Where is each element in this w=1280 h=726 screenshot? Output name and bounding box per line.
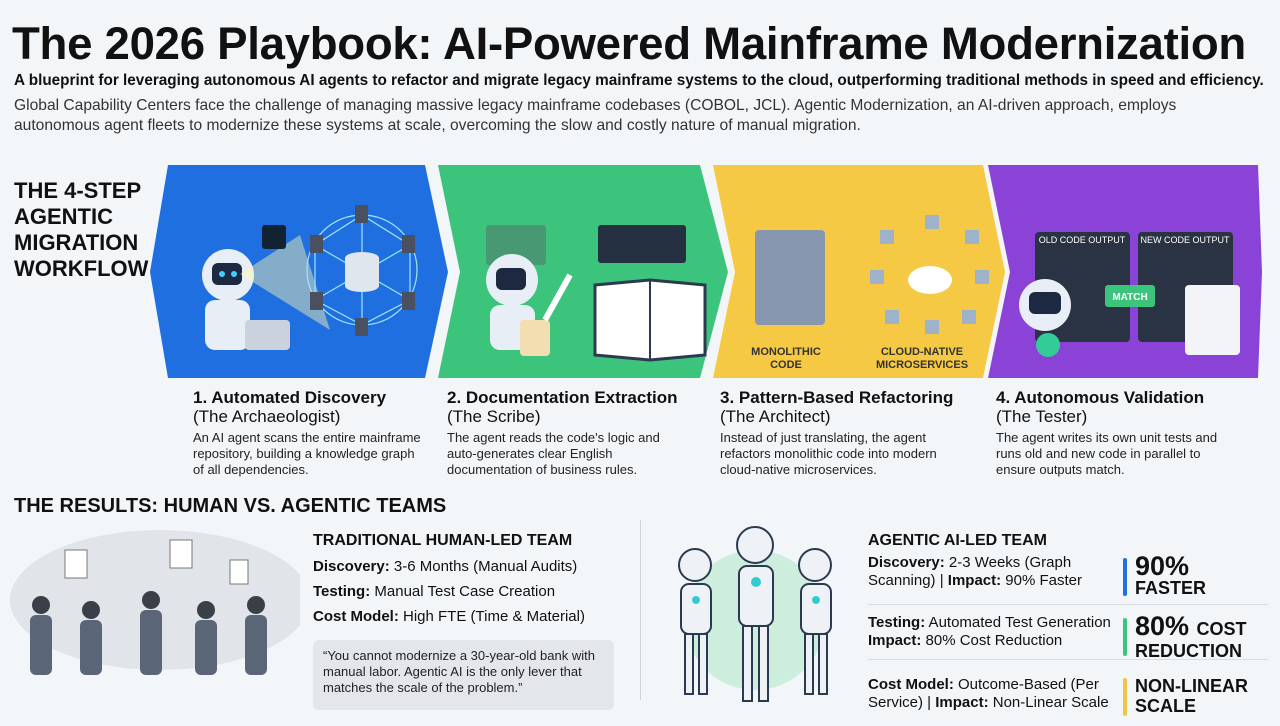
workflow heading: WORKFLOW: [14, 256, 148, 281]
step 3 text: [720, 388, 953, 477]
icon: monolith vs microservices: [755, 230, 825, 325]
step 1 text: [193, 388, 421, 477]
step 4 text: [996, 388, 1217, 477]
illustration: overwhelmed humans: [10, 530, 300, 675]
panel: step 2: [438, 165, 728, 378]
intro paragraph: Global Capability Centers face the challenge of managing massive legacy mainframe codebases (COBOL, JCL). Agentic Modernization, an AI-driven approach, employs autonomous agent fleets to modernize these systems at scale, overcoming the slow and costly nature of manual migration.: [14, 97, 1176, 134]
metric: cost model: [868, 676, 1248, 716]
step 2 text: (The Scribe): [447, 407, 541, 426]
quote callout: [313, 640, 614, 710]
metric: testing: [868, 614, 1268, 660]
metric: discovery: [868, 554, 1268, 605]
panel: step 1: [150, 165, 448, 378]
panel: step 3: CODE: [770, 359, 802, 371]
metric: discovery: 90%: [1135, 551, 1189, 581]
metric: cost model: SCALE: [1135, 696, 1196, 716]
results heading: THE RESULTS: HUMAN VS. AGENTIC TEAMS: [14, 495, 446, 517]
metric: discovery: FASTER: [1135, 578, 1206, 598]
metric: cost model: Cost Model: Outcome-Based (Per Service) | Impact: Non-Linear Scale: [868, 676, 1109, 711]
agentic team column: [868, 532, 1268, 716]
panel: step 3: CLOUD-NATIVE: [881, 346, 963, 358]
icon: scribe robot: [486, 225, 686, 356]
icon: tester robot: [1019, 232, 1240, 357]
metric: cost model: NON-LINEAR: [1135, 676, 1248, 696]
panel: step 3: [713, 165, 1005, 378]
panel: step 4: [988, 165, 1262, 378]
step 4 text: 4. Autonomous Validation: [996, 388, 1204, 407]
metric: testing: REDUCTION: [1135, 641, 1242, 661]
metric: discovery: Discovery: 2-3 Weeks (Graph Scanning) | Impact: 90% Faster: [868, 554, 1082, 589]
step 4 text: (The Tester): [996, 407, 1087, 426]
quote callout: “You cannot modernize a 30-year-old bank with manual labor. Agentic AI is the only lever that matches the scale of the problem.”: [323, 648, 595, 695]
icon: tester robot: NEW CODE OUTPUT: [1140, 235, 1230, 245]
metric: testing: Testing: Automated Test Generation Impact: 80% Cost Reduction: [868, 614, 1111, 649]
traditional team column: Testing: Manual Test Case Creation: [313, 583, 555, 600]
step 2 text: 2. Documentation Extraction: [447, 388, 677, 407]
step 4 text: The agent writes its own unit tests and runs old and new code in parallel to ensure outputs match.: [996, 430, 1217, 477]
subtitle: A blueprint for leveraging autonomous AI agents to refactor and migrate legacy mainframe systems to the cloud, outperforming traditional methods in speed and efficiency.: [14, 72, 1264, 89]
panel: step 3: MONOLITHIC: [751, 346, 821, 358]
icon: knowledge graph: [307, 215, 417, 325]
title: The 2026 Playbook: AI-Powered Mainframe Modernization: [12, 18, 1246, 69]
step 1 text: 1. Automated Discovery: [193, 388, 386, 407]
traditional team column: Discovery: 3-6 Months (Manual Audits): [313, 558, 577, 575]
workflow heading: MIGRATION: [14, 230, 138, 255]
traditional team column: [313, 532, 585, 625]
step 1 text: (The Archaeologist): [193, 407, 340, 426]
workflow heading: THE 4-STEP: [14, 178, 141, 203]
agentic team column: AGENTIC AI-LED TEAM: [868, 532, 1047, 549]
step 2 text: The agent reads the code's logic and auto-generates clear English documentation of business rules.: [447, 430, 660, 477]
step 3 text: 3. Pattern-Based Refactoring: [720, 388, 953, 407]
workflow heading: [14, 178, 148, 281]
icon: robot scanning: [202, 235, 330, 350]
traditional team column: TRADITIONAL HUMAN-LED TEAM: [313, 532, 572, 549]
icon: open book: [595, 280, 705, 360]
metric: testing: 80% COST: [1135, 611, 1247, 641]
step 3 text: (The Architect): [720, 407, 831, 426]
step 2 text: [447, 388, 677, 477]
icon: tester robot: MATCH: [1112, 292, 1148, 303]
step 1 text: An AI agent scans the entire mainframe repository, building a knowledge graph of all dependencies.: [193, 430, 421, 477]
panel: step 3: MICROSERVICES: [876, 359, 968, 371]
illustration: robot team: [678, 526, 832, 702]
workflow heading: AGENTIC: [14, 204, 113, 229]
icon: tester robot: OLD CODE OUTPUT: [1039, 235, 1126, 245]
step 3 text: Instead of just translating, the agent refactors monolithic code into modern cloud-native microservices.: [720, 430, 937, 477]
traditional team column: Cost Model: High FTE (Time & Material): [313, 608, 585, 625]
